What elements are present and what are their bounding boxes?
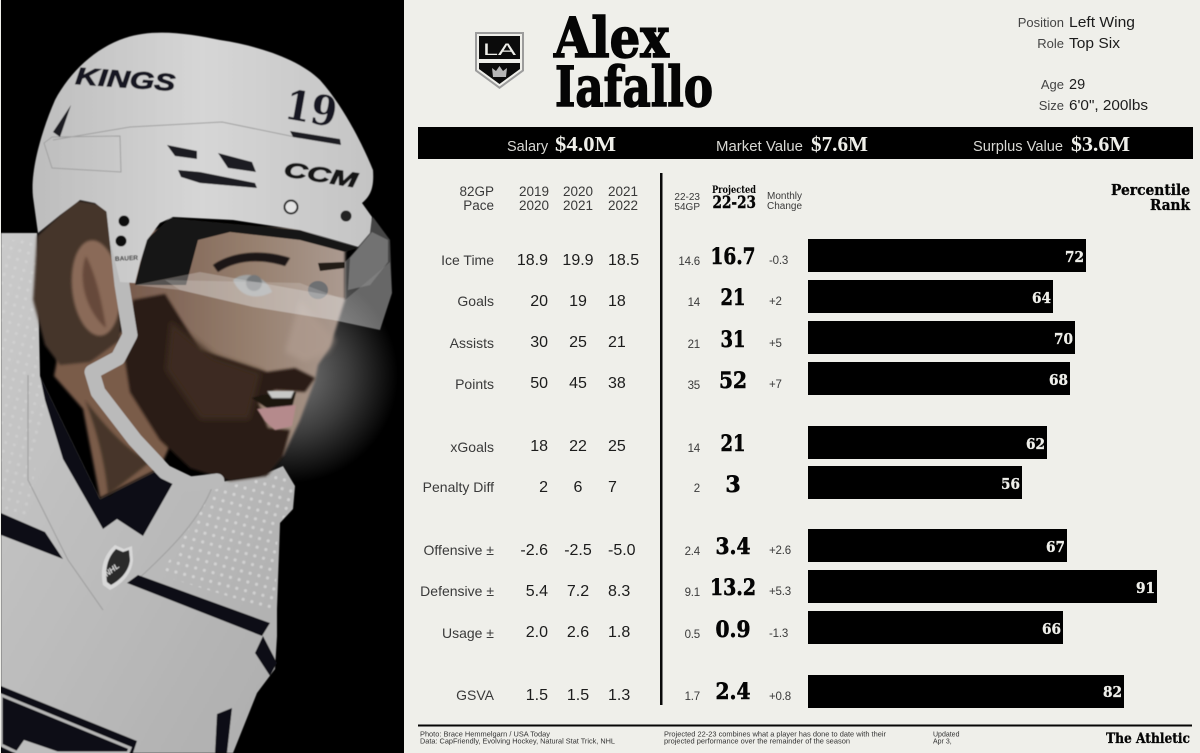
column headers: Percentile xyxy=(1111,182,1190,199)
row: GSVA: 1.5 xyxy=(526,687,548,704)
title: player name xyxy=(553,5,713,119)
row: Ice Time: -0.3 xyxy=(769,255,788,267)
row: GSVA: 82 xyxy=(1103,684,1122,701)
column headers: 82GP xyxy=(459,184,494,199)
row: Points: 68 xyxy=(1049,372,1068,389)
chin strap xyxy=(92,212,217,484)
player bio: Size xyxy=(1039,98,1064,113)
row: Assists xyxy=(450,321,1075,354)
brand: The Athletic: The Athletic xyxy=(1106,731,1190,747)
row: Offensive: -2.6 xyxy=(520,542,548,559)
salary xyxy=(507,132,616,156)
row: Goals: 14 xyxy=(688,297,701,309)
beard texture xyxy=(165,320,262,420)
column headers: 2021 xyxy=(563,198,593,213)
eye left xyxy=(233,275,272,296)
mouth xyxy=(252,391,296,430)
row: GSVA: 1.7 xyxy=(685,691,700,703)
row: xGoals: 22 xyxy=(569,438,587,455)
row: Goals: 64 xyxy=(1032,290,1051,307)
row: Points: 38 xyxy=(608,375,626,392)
ear xyxy=(70,238,119,338)
row: Usage: 66 xyxy=(1042,621,1061,638)
title: player name: Iafallo xyxy=(555,54,713,119)
player bio: Top Six xyxy=(1069,36,1121,52)
row: Usage: 0.5 xyxy=(685,629,700,641)
row: Defensive: 91 xyxy=(1136,580,1155,597)
column headers: Monthly xyxy=(767,191,802,202)
row: Penalty Diff: Penalty Diff xyxy=(423,479,494,495)
footer credits: Data: CapFriendly, Evolving Hockey, Natural Stat Trick, NHL xyxy=(420,738,615,746)
row: Offensive: 3.4 xyxy=(716,534,750,560)
illustration: player xyxy=(1,33,392,753)
row: Ice Time: 14.6 xyxy=(678,256,700,268)
surplus value: $3.6M xyxy=(1071,132,1130,156)
panel: player photo xyxy=(1,0,404,753)
helmet details: CCM xyxy=(282,158,360,193)
nose xyxy=(287,314,337,358)
footer credits: Photo: Brace Hemmelgarn / USA Today xyxy=(420,732,551,738)
row: Points: Points xyxy=(455,376,494,392)
market value: $7.6M xyxy=(811,132,868,156)
black undershirt xyxy=(40,376,173,536)
row: Offensive: 2.4 xyxy=(685,546,701,558)
row: Usage: -1.3 xyxy=(769,628,788,640)
row: Usage: 2.6 xyxy=(567,624,589,641)
row: Defensive: +5.3 xyxy=(769,586,791,598)
salary: Salary xyxy=(507,139,549,155)
row: Offensive: Offensive ± xyxy=(424,542,494,558)
row: GSVA xyxy=(456,675,1124,708)
row: Usage: 0.9 xyxy=(716,617,750,643)
helmet details: 19 xyxy=(281,81,341,137)
helmet details: BAUER xyxy=(115,255,138,263)
row: Goals: 21 xyxy=(720,285,746,311)
footer credits xyxy=(420,732,615,746)
hair xyxy=(33,200,125,365)
column headers: 2019 xyxy=(519,184,549,199)
column headers: 2022 xyxy=(608,198,638,213)
row: Points: +7 xyxy=(769,379,782,391)
player bio xyxy=(1018,15,1148,114)
row: Ice Time: 19.9 xyxy=(562,252,594,269)
row: Assists: 70 xyxy=(1054,331,1073,348)
row: Usage xyxy=(442,611,1063,644)
inner ear xyxy=(83,256,106,328)
helmet shell xyxy=(33,33,373,283)
neck xyxy=(52,330,170,500)
row: Points: 50 xyxy=(530,375,548,392)
visor xyxy=(135,217,392,330)
collar seam xyxy=(28,375,213,610)
jersey xyxy=(1,233,295,753)
column headers: Rank xyxy=(1150,197,1191,214)
row: Usage: 1.8 xyxy=(608,624,630,641)
row: Penalty Diff: 2 xyxy=(694,483,700,495)
column headers: 2020 xyxy=(563,184,593,199)
row: Defensive: 8.3 xyxy=(608,583,630,600)
row: Goals: 19 xyxy=(569,293,587,310)
jersey stripes xyxy=(1,513,277,753)
footer rule xyxy=(418,724,1192,726)
row: Defensive: 7.2 xyxy=(567,583,589,600)
row: Assists: 31 xyxy=(720,327,746,353)
row: Offensive: 67 xyxy=(1046,539,1065,556)
row: Ice Time: 18.5 xyxy=(608,252,639,269)
row: Goals: Goals xyxy=(457,293,494,309)
market value xyxy=(716,132,868,156)
jersey dot texture xyxy=(1,240,293,610)
row: xGoals: 18 xyxy=(530,438,548,455)
row: Offensive: -5.0 xyxy=(608,542,636,559)
row: Penalty Diff: 6 xyxy=(574,479,583,496)
eye right xyxy=(308,281,328,299)
footer note xyxy=(664,732,887,746)
row: GSVA: 1.5 xyxy=(567,687,589,704)
row: Goals: +2 xyxy=(769,296,782,308)
jersey number fragment xyxy=(15,740,62,753)
row: Ice Time: 72 xyxy=(1065,249,1084,266)
row: Assists: 21 xyxy=(608,334,626,351)
row: Offensive: +2.6 xyxy=(769,545,791,557)
helmet details xyxy=(44,63,360,263)
market value: Market Value xyxy=(716,139,803,155)
row: GSVA: GSVA xyxy=(456,687,495,703)
neck stubble xyxy=(85,400,150,495)
footer updated date: Updated xyxy=(933,732,960,738)
row: xGoals: xGoals xyxy=(450,439,494,455)
row: Penalty Diff: 7 xyxy=(608,479,617,496)
column headers: Projected xyxy=(712,185,756,196)
player bio: 29 xyxy=(1069,77,1085,93)
row: Points: 52 xyxy=(719,368,747,394)
column headers xyxy=(459,182,1191,214)
row: GSVA: 1.3 xyxy=(608,687,630,704)
logo: LA Kings shield xyxy=(475,32,524,89)
row: Assists: Assists xyxy=(450,335,494,351)
row: Ice Time: 16.7 xyxy=(710,244,756,270)
footer note: Projected 22-23 combines what a player has done to date with their xyxy=(664,732,887,738)
player bio: 6'0", 200lbs xyxy=(1069,98,1148,114)
row: Defensive xyxy=(420,570,1157,603)
row: Assists: 25 xyxy=(569,334,587,351)
row: Assists: 30 xyxy=(530,334,548,351)
row: Defensive: 5.4 xyxy=(526,583,548,600)
helmet details: KINGS xyxy=(75,63,176,97)
row: Assists: +5 xyxy=(769,338,782,350)
row: xGoals: 21 xyxy=(720,431,746,457)
footer note: projected performance over the remainder of the season xyxy=(664,738,850,746)
row: Penalty Diff: 2 xyxy=(539,479,548,496)
column headers: Pace xyxy=(463,198,494,213)
row: xGoals: 25 xyxy=(608,438,626,455)
eyebrow right xyxy=(318,262,345,271)
row: Points: 35 xyxy=(688,380,700,392)
row: GSVA: +0.8 xyxy=(769,691,791,703)
footer updated date xyxy=(933,732,960,746)
beard xyxy=(125,294,315,481)
icon: nhl shield: NHL xyxy=(103,561,121,579)
row: Ice Time: 18.9 xyxy=(517,252,548,269)
surplus value: Surplus Value xyxy=(973,139,1063,155)
row: Offensive: -2.5 xyxy=(564,542,592,559)
row: Goals: 18 xyxy=(608,293,626,310)
row: xGoals xyxy=(450,426,1047,459)
row: Penalty Diff: 56 xyxy=(1001,476,1020,493)
row: Offensive xyxy=(424,529,1067,562)
row: Usage: Usage ± xyxy=(442,625,494,641)
row: xGoals: 14 xyxy=(688,443,701,455)
row: Defensive: 13.2 xyxy=(710,575,756,601)
surplus value xyxy=(973,132,1130,156)
column headers: 54GP xyxy=(674,202,700,213)
jersey number plate xyxy=(1,695,130,753)
column headers: 2021 xyxy=(608,184,638,199)
row: GSVA: 2.4 xyxy=(716,679,750,705)
panel: contract value bar xyxy=(418,127,1193,159)
column divider xyxy=(660,173,662,705)
player bio: Role xyxy=(1037,36,1064,51)
column headers: 2020 xyxy=(519,198,549,213)
glow behind face xyxy=(272,294,392,476)
column headers: 22-23 xyxy=(712,193,756,213)
row: Penalty Diff xyxy=(423,466,1022,499)
row: Ice Time: Ice Time xyxy=(441,252,494,268)
face skin xyxy=(118,228,345,456)
title: player name: Alex xyxy=(553,5,670,70)
column headers: 22-23 xyxy=(674,192,700,203)
row: Goals xyxy=(457,280,1053,313)
player bio: Age xyxy=(1041,77,1064,92)
row: Defensive: 9.1 xyxy=(685,587,700,599)
footer updated date: Apr 3, xyxy=(933,738,952,746)
icon: nhl shield xyxy=(102,545,133,590)
row: Goals: 20 xyxy=(530,293,548,310)
salary: $4.0M xyxy=(555,132,616,156)
row: Points xyxy=(455,362,1070,395)
column headers: Change xyxy=(767,201,802,212)
row: Defensive: Defensive ± xyxy=(420,583,494,599)
player bio: Position xyxy=(1018,15,1064,30)
eyebrow left xyxy=(213,253,290,272)
row: xGoals: 62 xyxy=(1026,436,1045,453)
row: Penalty Diff: 3 xyxy=(725,472,741,498)
logo: LA Kings shield: LA xyxy=(483,40,517,59)
row: Assists: 21 xyxy=(688,339,700,351)
player bio: Left Wing xyxy=(1069,15,1135,31)
row: Points: 45 xyxy=(569,375,587,392)
row: Usage: 2.0 xyxy=(526,624,548,641)
row: Ice Time xyxy=(441,239,1086,272)
